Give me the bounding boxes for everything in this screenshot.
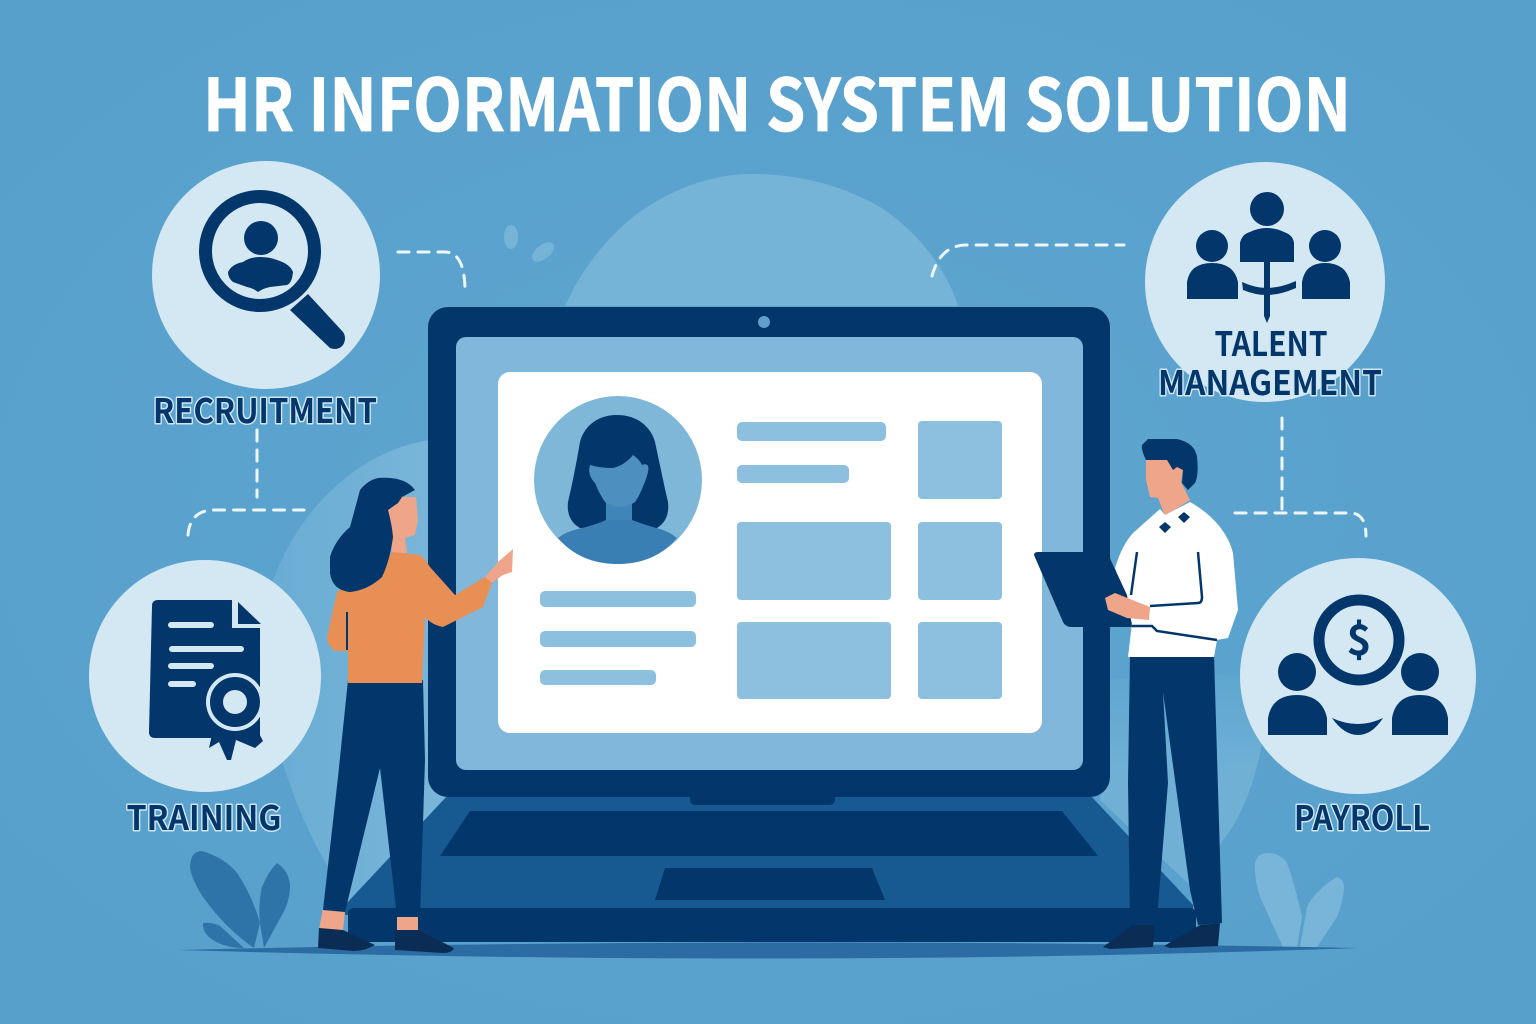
- panel: training: [89, 560, 321, 840]
- hair: [1142, 439, 1198, 490]
- avatar: [534, 396, 702, 564]
- laptop base: [345, 790, 1196, 942]
- panel: recruitment: [152, 161, 380, 433]
- collar buttons: [1159, 512, 1190, 533]
- icon: magnifying glass with person: [206, 196, 345, 349]
- hand: [1105, 593, 1150, 620]
- legs: [323, 680, 425, 917]
- woman figure: [318, 478, 513, 953]
- shirt lines: [1131, 552, 1217, 640]
- laptop bezel: [428, 307, 1110, 797]
- neck and face: [388, 497, 418, 553]
- background blobs: [266, 174, 1270, 905]
- panel: talent management: [1145, 162, 1385, 405]
- panel: talent management: MANAGEMENT: [1158, 356, 1382, 405]
- plant: left: [190, 851, 290, 948]
- dashed connectors: [188, 245, 1366, 536]
- laptop screen: [456, 337, 1083, 770]
- man figure: [1034, 439, 1238, 949]
- shoes: [318, 928, 375, 951]
- label: talent management: TALENT: [1214, 317, 1328, 366]
- label: recruitment: RECRUITMENT: [153, 384, 377, 433]
- shoes: [1103, 924, 1155, 949]
- panel: payroll: [1240, 558, 1476, 840]
- plant: right: [1255, 853, 1344, 947]
- ankles: [319, 908, 418, 932]
- content tiles: [737, 421, 1002, 699]
- hand: [485, 549, 513, 584]
- tablet: [1034, 552, 1132, 627]
- label: training: TRAINING: [126, 791, 282, 840]
- text lines: [540, 422, 886, 685]
- icon: coin and people: [1268, 600, 1448, 735]
- icon: certificate: [149, 600, 264, 760]
- icon: team hierarchy: [1187, 192, 1350, 323]
- trousers: [1128, 655, 1222, 925]
- label: payroll: PAYROLL: [1294, 791, 1430, 840]
- ground line: [178, 942, 1358, 959]
- torso and arm: [327, 552, 492, 683]
- profile card: [498, 372, 1042, 733]
- title: HR INFORMATION SYSTEM SOLUTION: [203, 47, 1351, 152]
- neck and head: [1146, 459, 1190, 516]
- shirt: [1115, 502, 1238, 657]
- icon: coin and people: $: [1347, 607, 1371, 668]
- hair: [330, 478, 415, 592]
- laptop: [345, 307, 1196, 942]
